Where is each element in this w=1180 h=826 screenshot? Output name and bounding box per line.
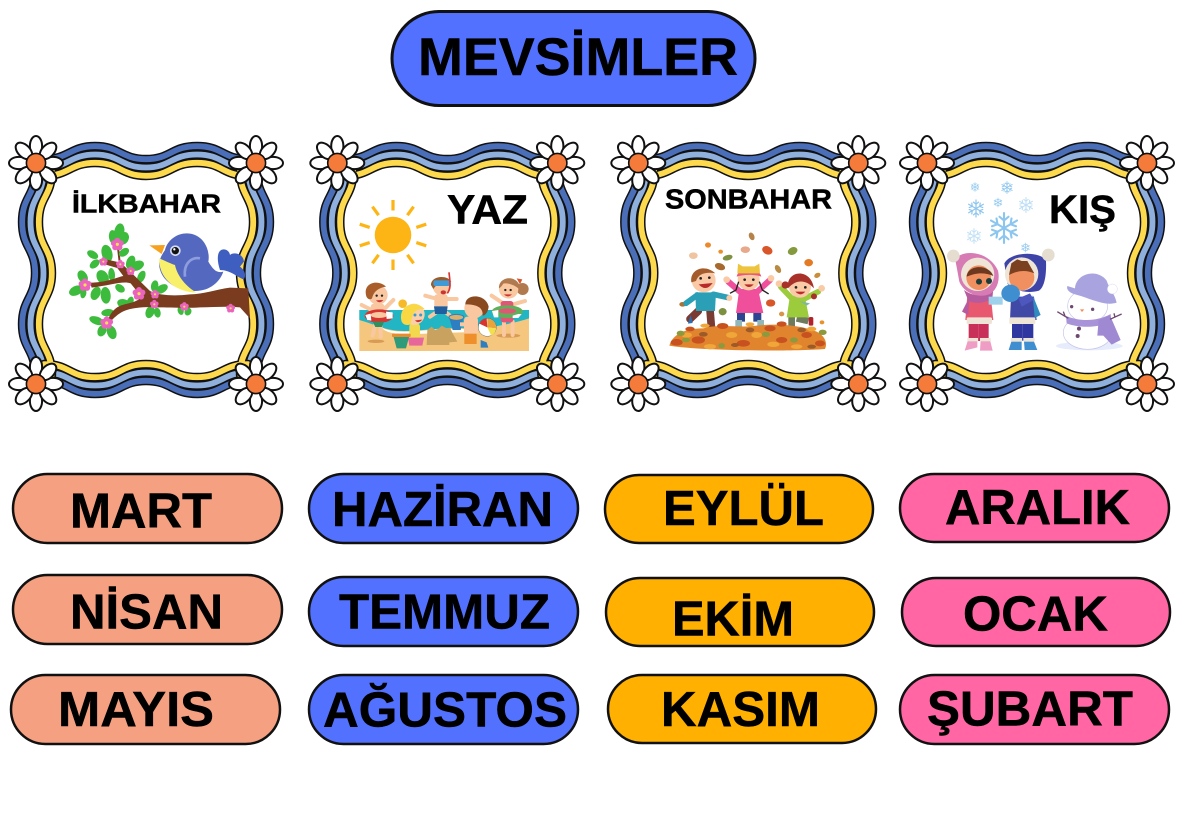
illustration: bird on blossoming branch [67, 223, 250, 340]
month: KASIM: KASIM [661, 683, 820, 737]
falling leaves [679, 232, 824, 324]
pile of leaves [669, 321, 827, 351]
month: NİSAN [13, 575, 282, 644]
icon: sun [360, 200, 426, 270]
month: ŞUBART [900, 675, 1169, 744]
title [392, 12, 755, 106]
summer months column [309, 474, 578, 744]
illustration: children and snowman [947, 249, 1123, 351]
child in navy [1001, 249, 1055, 350]
heading: summer: YAZ [447, 186, 528, 232]
month: TEMMUZ: TEMMUZ [339, 586, 550, 640]
month: ŞUBART: ŞUBART [927, 682, 1133, 736]
girl in pink coat [723, 264, 774, 330]
month: MART: MART [70, 484, 212, 538]
winter months column [900, 474, 1170, 744]
month: NİSAN: NİSAN [70, 586, 223, 640]
girl with green ring [492, 278, 529, 335]
boy in teal sweater [686, 268, 732, 334]
month: OCAK [902, 578, 1170, 646]
panel: autumn card [611, 136, 885, 411]
month: TEMMUZ [309, 577, 578, 646]
panel: summer card [310, 136, 584, 411]
month: MAYIS: MAYIS [58, 683, 214, 737]
sand castle [427, 326, 457, 345]
spring floral frame [9, 136, 283, 411]
month: MAYIS [11, 675, 280, 744]
spring months column [11, 474, 282, 744]
heading: spring: İLKBAHAR [72, 188, 221, 218]
autumn months column [605, 475, 876, 743]
month: EKİM: EKİM [672, 592, 794, 646]
icon: snowflakes [966, 182, 1034, 252]
snorkel kid [425, 272, 457, 317]
winter floral frame [900, 136, 1174, 411]
blonde kid [392, 299, 425, 348]
snowman [1056, 274, 1123, 350]
panel: spring card [9, 136, 283, 411]
autumn floral frame [611, 136, 885, 411]
brown-haired kid with bucket [449, 296, 496, 348]
month: EKİM [606, 578, 874, 646]
heading: autumn: SONBAHAR [665, 184, 832, 214]
illustration: children on the beach [359, 272, 529, 351]
heading: winter: KIŞ [1049, 188, 1116, 232]
month: HAZİRAN: HAZİRAN [332, 483, 553, 537]
panel: winter card [900, 136, 1174, 411]
month: ARALIK [900, 474, 1169, 542]
month: KASIM [608, 675, 876, 743]
summer floral frame [310, 136, 584, 411]
kid with red ring [362, 283, 393, 337]
month: OCAK: OCAK [963, 588, 1108, 642]
month: HAZİRAN [309, 474, 578, 543]
illustration: children in falling leaves [669, 232, 827, 351]
title: MEVSİMLER [418, 28, 738, 87]
month: MART [13, 474, 282, 543]
month: EYLÜL [605, 475, 873, 543]
girl in green coat [776, 274, 825, 336]
month: ARALIK: ARALIK [945, 481, 1130, 535]
month: EYLÜL: EYLÜL [663, 482, 824, 536]
month: AĞUSTOS: AĞUSTOS [323, 684, 567, 738]
child in pink [947, 250, 1003, 351]
